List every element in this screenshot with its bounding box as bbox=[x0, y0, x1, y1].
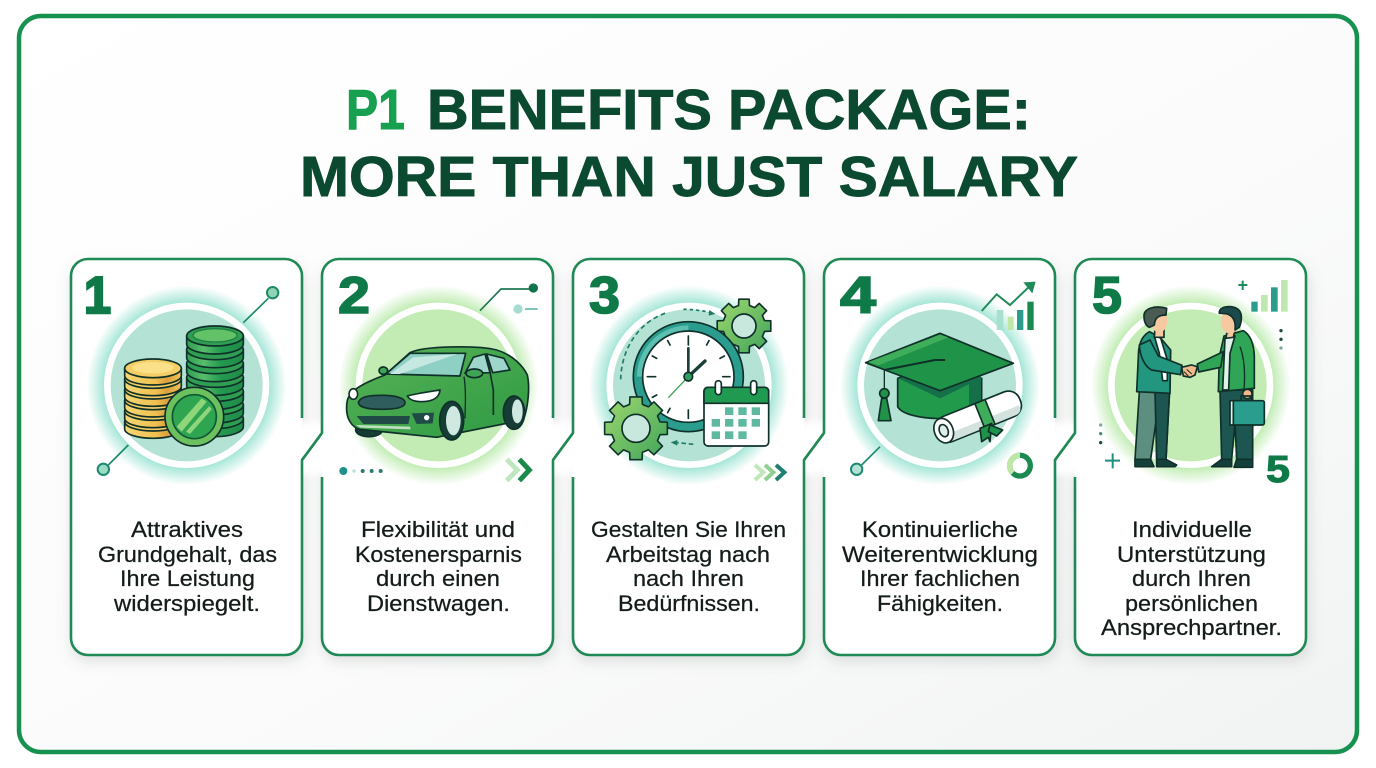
panel: card 5 personal contact bbox=[1055, 259, 1306, 655]
description 1: Grundgehalt, das bbox=[98, 542, 277, 567]
icon: green car bbox=[338, 283, 538, 485]
description 4: Kontinuierliche bbox=[862, 517, 1018, 542]
description 1: widerspiegelt. bbox=[113, 591, 260, 616]
description 3 bbox=[591, 517, 786, 616]
icon: coin stacks bbox=[87, 285, 287, 485]
description 4: Weiterentwicklung bbox=[842, 542, 1038, 567]
number 3: 3 bbox=[589, 267, 620, 325]
description 5: Individuelle bbox=[1132, 517, 1252, 542]
description 4: Fähigkeiten. bbox=[877, 591, 1003, 616]
title bbox=[300, 78, 1078, 209]
description 5 bbox=[1101, 517, 1282, 640]
title: BENEFITS PACKAGE: bbox=[427, 78, 1031, 142]
icon: clock, gears and calendar bbox=[589, 285, 789, 485]
panel: card 4 development bbox=[804, 259, 1075, 655]
description 1: Attraktives bbox=[131, 517, 243, 542]
description 5: persönlichen bbox=[1125, 591, 1258, 616]
description 1: Ihre Leistung bbox=[120, 566, 255, 591]
panel: card 2 company car bbox=[302, 259, 573, 655]
number 2: 2 bbox=[338, 267, 370, 325]
description 2: durch einen bbox=[376, 566, 500, 591]
description 5: durch Ihren bbox=[1132, 566, 1251, 591]
description 2 bbox=[355, 517, 522, 616]
description 3: nach Ihren bbox=[633, 566, 744, 591]
panel: card 3 working hours bbox=[553, 259, 824, 655]
description 3: Arbeitstag nach bbox=[606, 542, 770, 567]
small number 5: 5 bbox=[1266, 449, 1290, 491]
icon: two people shaking hands bbox=[1091, 280, 1291, 485]
icon: graduation cap and diploma bbox=[840, 282, 1040, 485]
description 1 bbox=[98, 517, 277, 616]
description 5: Unterstützung bbox=[1117, 542, 1266, 567]
title: MORE THAN JUST SALARY bbox=[300, 145, 1078, 209]
description 2: Kostenersparnis bbox=[355, 542, 522, 567]
number 4: 4 bbox=[840, 267, 876, 325]
number 1: 1 bbox=[84, 267, 111, 325]
description 5: Ansprechpartner. bbox=[1101, 615, 1282, 640]
number 5: 5 bbox=[1092, 267, 1122, 325]
description 2: Flexibilität und bbox=[361, 517, 515, 542]
description 3: Gestalten Sie Ihren bbox=[591, 517, 786, 542]
description 2: Dienstwagen. bbox=[367, 591, 510, 616]
description 3: Bedürfnissen. bbox=[618, 591, 760, 616]
title: P1 bbox=[346, 78, 405, 142]
description 4 bbox=[842, 517, 1038, 616]
description 4: Ihrer fachlichen bbox=[860, 566, 1020, 591]
panel: card 1 base salary bbox=[71, 259, 322, 655]
